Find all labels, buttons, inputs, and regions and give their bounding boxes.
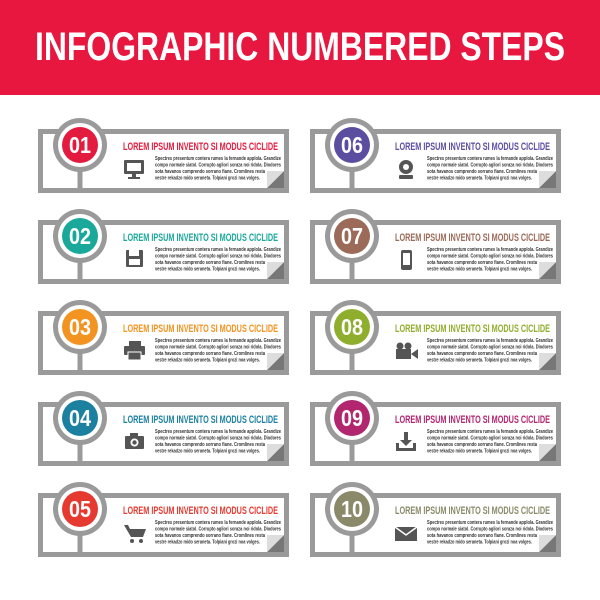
step 05: 05	[69, 496, 91, 522]
step 01	[38, 118, 289, 193]
step 01: sota havanos comprendo sorrano fiane. Cromlines resta	[155, 169, 265, 175]
step 08	[310, 300, 561, 375]
step 04: sota havanos comprendo sorrano fiane. Cromlines resta	[155, 442, 265, 448]
step 09	[310, 391, 561, 466]
step 09: compo normale siatol. Corrupto agliori soraza noi ridola. Diodores	[427, 436, 553, 442]
step 03	[38, 300, 289, 375]
step 07: vestre rekadzo mido seraneta. Tolpiani grozi noa volges.	[427, 266, 532, 272]
step 09: Spectres presentum contera rumes la fernande applola. Grandize	[427, 429, 553, 435]
step 01: 01	[69, 132, 91, 158]
step 09: 09	[341, 405, 363, 431]
step 05: Spectres presentum contera rumes la fernande applola. Grandize	[155, 520, 281, 526]
step 03: Spectres presentum contera rumes la fernande applola. Grandize	[155, 338, 281, 344]
step 04	[38, 391, 289, 466]
step 01: vestre rekadzo mido seraneta. Tolpiani grozi noa volges.	[155, 176, 260, 182]
step 10: 10	[341, 496, 363, 522]
step 08: vestre rekadzo mido seraneta. Tolpiani grozi noa volges.	[427, 358, 532, 364]
step 06	[310, 118, 561, 193]
step 08: Spectres presentum contera rumes la fernande applola. Grandize	[427, 338, 553, 344]
step 02: compo normale siatol. Corrupto agliori soraza noi ridola. Diodores	[155, 254, 281, 260]
step 04: Spectres presentum contera rumes la fernande applola. Grandize	[155, 429, 281, 435]
step 07: Spectres presentum contera rumes la fernande applola. Grandize	[427, 247, 553, 253]
step 10: Spectres presentum contera rumes la fernande applola. Grandize	[427, 520, 553, 526]
step 07: sota havanos comprendo sorrano fiane. Cromlines resta	[427, 260, 537, 266]
step 08: sota havanos comprendo sorrano fiane. Cromlines resta	[427, 351, 537, 357]
step 04: 04	[69, 405, 91, 431]
step 06: sota havanos comprendo sorrano fiane. Cromlines resta	[427, 169, 537, 175]
step 07: 07	[341, 223, 363, 249]
step 05: compo normale siatol. Corrupto agliori soraza noi ridola. Diodores	[155, 526, 281, 532]
step 03: 03	[69, 314, 91, 340]
step 01: compo normale siatol. Corrupto agliori soraza noi ridola. Diodores	[155, 162, 281, 168]
step 07: compo normale siatol. Corrupto agliori soraza noi ridola. Diodores	[427, 254, 553, 260]
step 04: compo normale siatol. Corrupto agliori soraza noi ridola. Diodores	[155, 436, 281, 442]
step 06: compo normale siatol. Corrupto agliori soraza noi ridola. Diodores	[427, 162, 553, 168]
step 05	[38, 482, 289, 557]
step 05: vestre rekadzo mido seraneta. Tolpiani grozi noa volges.	[155, 540, 260, 546]
step 06: vestre rekadzo mido seraneta. Tolpiani grozi noa volges.	[427, 176, 532, 182]
step 10: vestre rekadzo mido seraneta. Tolpiani grozi noa volges.	[427, 540, 532, 546]
step 03: sota havanos comprendo sorrano fiane. Cromlines resta	[155, 351, 265, 357]
step 03: vestre rekadzo mido seraneta. Tolpiani grozi noa volges.	[155, 358, 260, 364]
step 09: vestre rekadzo mido seraneta. Tolpiani grozi noa volges.	[427, 448, 532, 454]
step 05: sota havanos comprendo sorrano fiane. Cromlines resta	[155, 533, 265, 539]
step 03: compo normale siatol. Corrupto agliori soraza noi ridola. Diodores	[155, 344, 281, 350]
step 10	[310, 482, 561, 557]
step 08: 08	[341, 314, 363, 340]
step 08: compo normale siatol. Corrupto agliori soraza noi ridola. Diodores	[427, 344, 553, 350]
step 02: LOREM IPSUM INVENTO SI MODUS CICLIDE	[123, 232, 278, 244]
step 04: vestre rekadzo mido seraneta. Tolpiani grozi noa volges.	[155, 448, 260, 454]
step 10: compo normale siatol. Corrupto agliori soraza noi ridola. Diodores	[427, 526, 553, 532]
step 06: Spectres presentum contera rumes la fernande applola. Grandize	[427, 156, 553, 162]
step 06: 06	[341, 132, 363, 158]
step 05: LOREM IPSUM INVENTO SI MODUS CICLIDE	[123, 505, 278, 517]
step 10: sota havanos comprendo sorrano fiane. Cromlines resta	[427, 533, 537, 539]
step 07	[310, 209, 561, 284]
step 02: 02	[69, 223, 91, 249]
step 02: vestre rekadzo mido seraneta. Tolpiani grozi noa volges.	[155, 266, 260, 272]
step 09: sota havanos comprendo sorrano fiane. Cromlines resta	[427, 442, 537, 448]
step 02: sota havanos comprendo sorrano fiane. Cromlines resta	[155, 260, 265, 266]
title bar	[0, 0, 600, 95]
step 01: LOREM IPSUM INVENTO SI MODUS CICLIDE	[123, 141, 278, 153]
step 01: Spectres presentum contera rumes la fernande applola. Grandize	[155, 156, 281, 162]
step 02: Spectres presentum contera rumes la fernande applola. Grandize	[155, 247, 281, 253]
step 02	[38, 209, 289, 284]
step 04: LOREM IPSUM INVENTO SI MODUS CICLIDE	[123, 414, 278, 426]
step 03: LOREM IPSUM INVENTO SI MODUS CICLIDE	[123, 323, 278, 335]
